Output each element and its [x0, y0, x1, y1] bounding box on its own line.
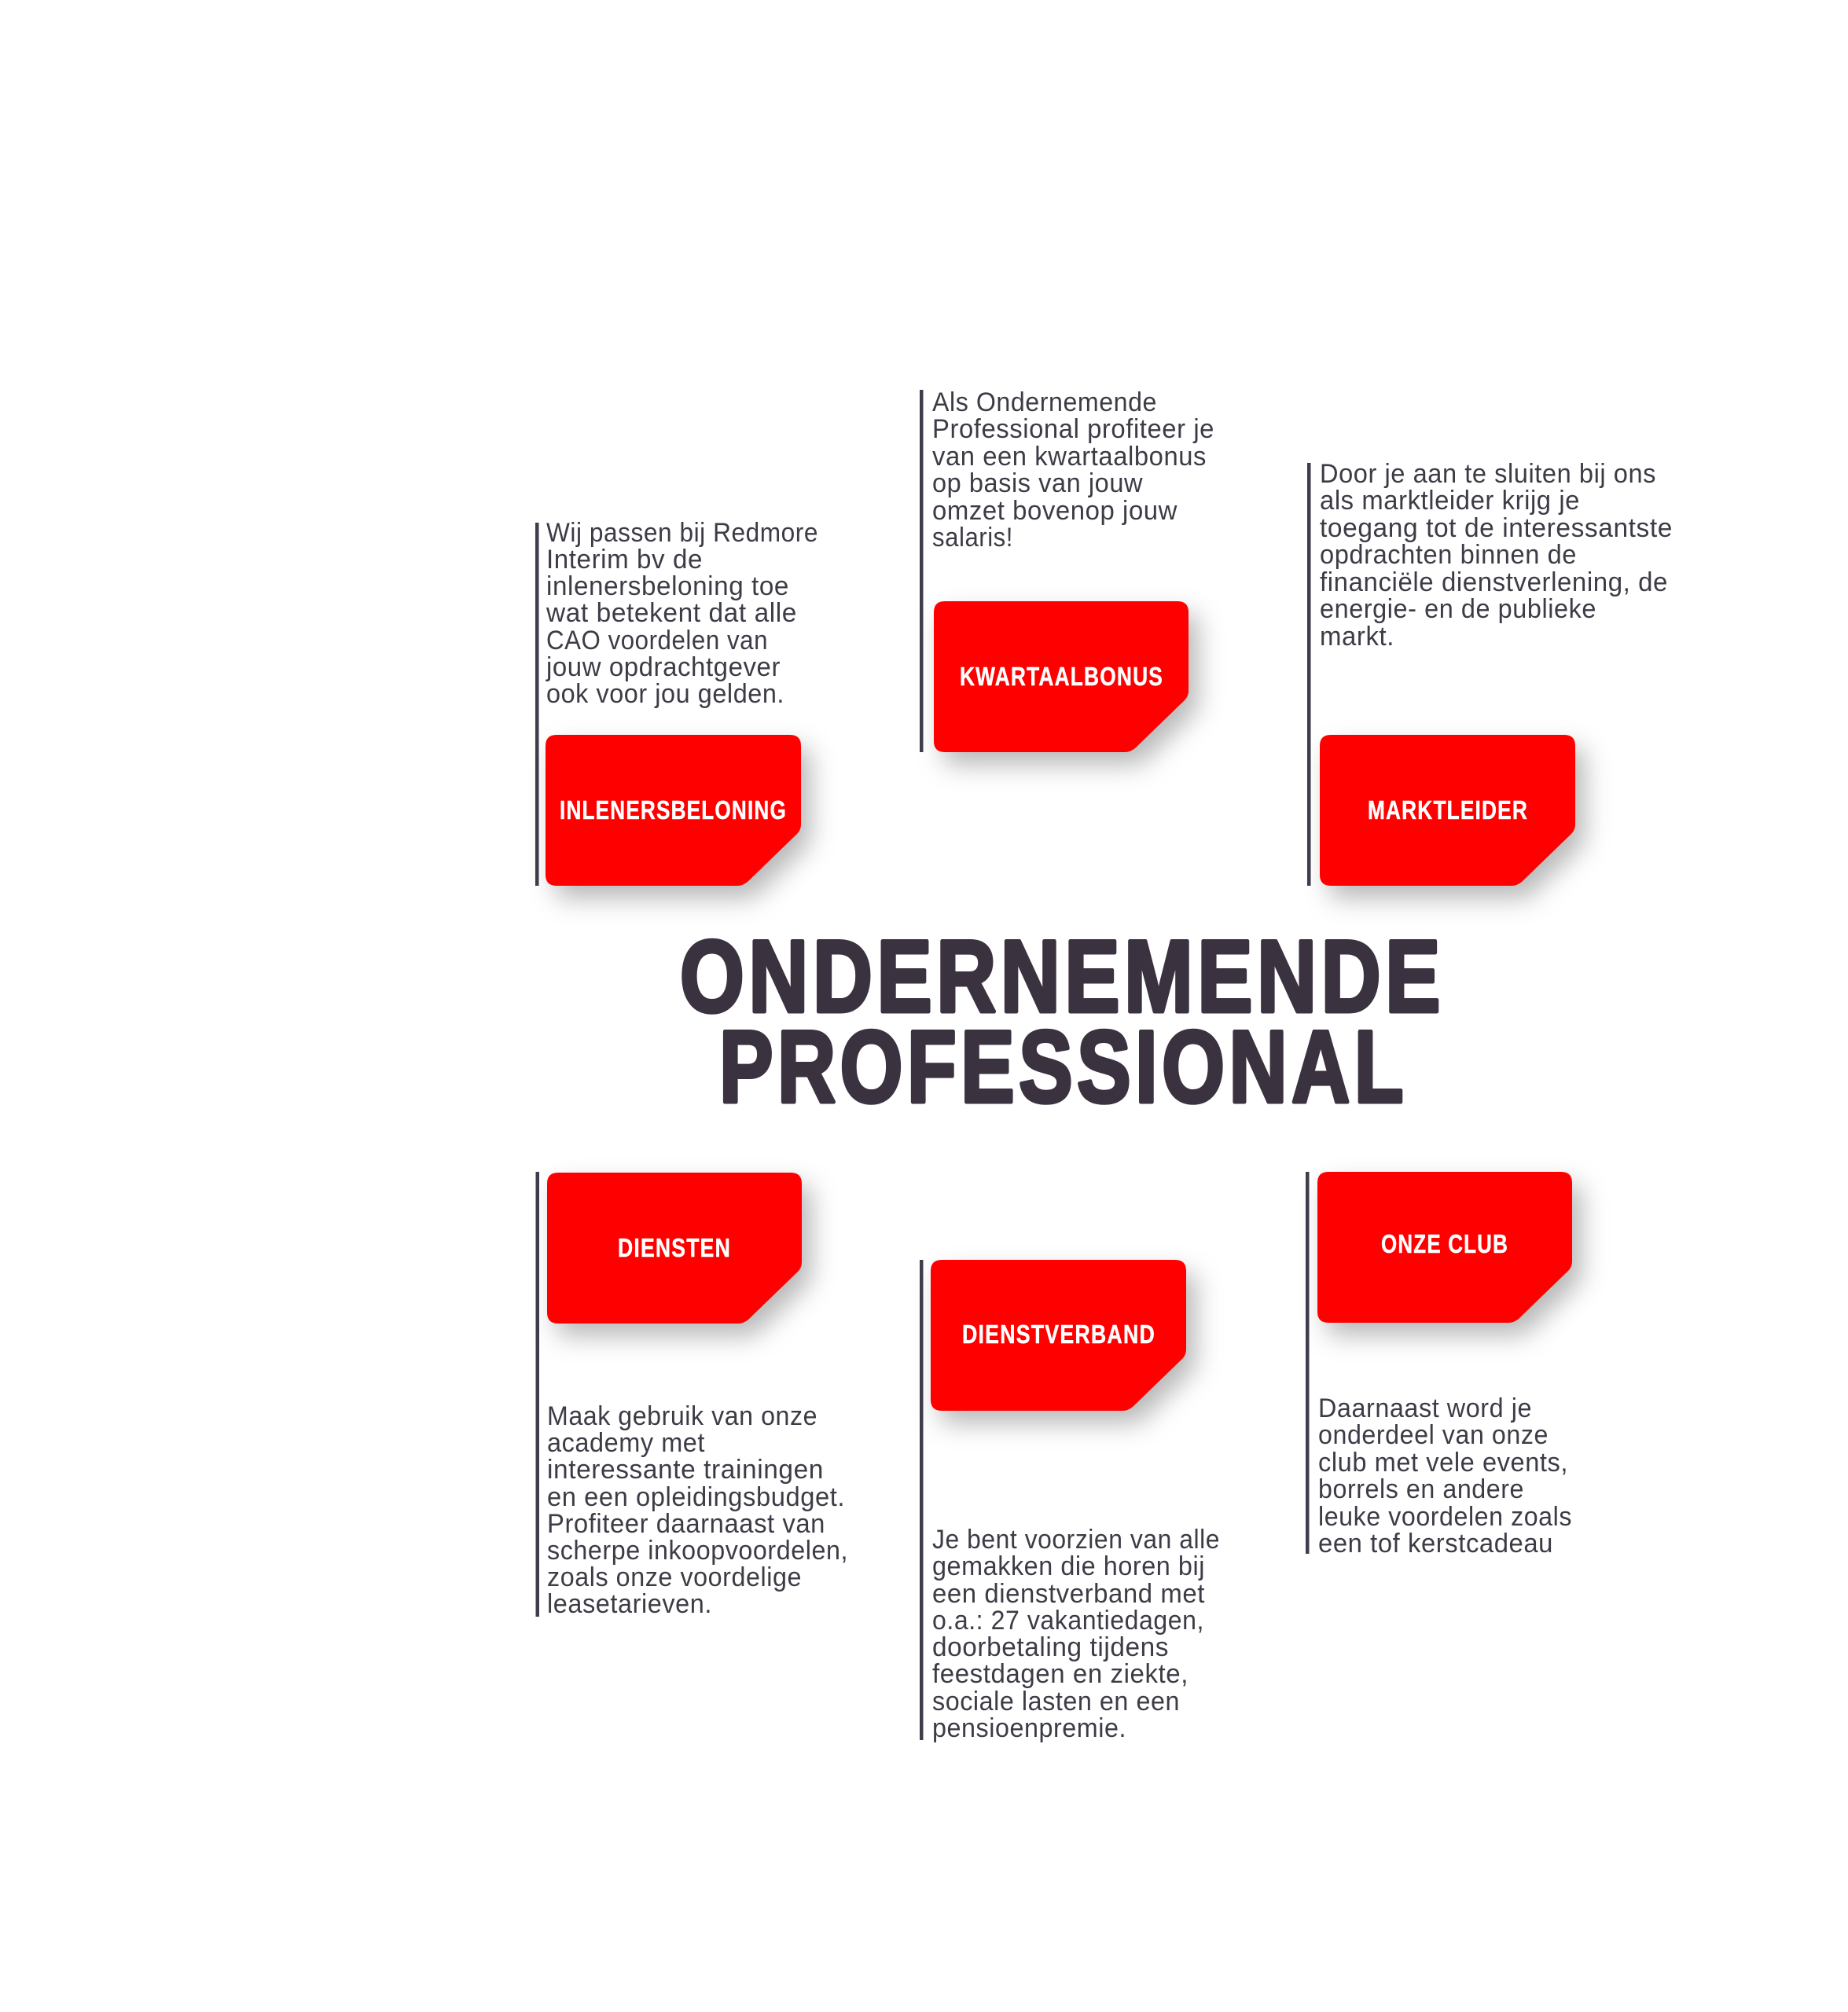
text: diensten description: academy met — [547, 1428, 705, 1458]
title: ONDERNEMENDE — [680, 919, 1445, 1034]
panel: inlenersbeloning — [535, 518, 818, 886]
text: diensten description: Maak gebruik van onze — [547, 1401, 817, 1431]
text: inlenersbeloning description: CAO voordelen van — [546, 626, 768, 655]
text: kwartaalbonus description: van een kwartaalbonus — [932, 442, 1207, 472]
card: marktleider: MARKTLEIDER — [1368, 795, 1528, 824]
text: diensten description: scherpe inkoopvoordelen, — [547, 1536, 848, 1566]
card: marktleider — [1320, 735, 1575, 886]
text: diensten description: interessante trainingen — [547, 1455, 824, 1485]
title — [680, 919, 1445, 1124]
text: diensten description: Profiteer daarnaast van — [547, 1509, 825, 1539]
text: marktleider description: opdrachten binnen de — [1320, 540, 1577, 570]
text: dienstverband description: gemakken die horen bij — [932, 1551, 1205, 1581]
card: dienstverband: DIENSTVERBAND — [962, 1320, 1155, 1349]
text: onze club description: Daarnaast word je — [1318, 1393, 1532, 1423]
text: inlenersbeloning description: wat betekent dat alle — [546, 598, 797, 628]
text: inlenersbeloning description: jouw opdrachtgever — [546, 652, 781, 682]
text: onze club description: een tof kerstcadeau — [1318, 1529, 1553, 1559]
card: kwartaalbonus — [934, 601, 1189, 752]
text: kwartaalbonus description: op basis van jouw — [932, 468, 1143, 498]
panel: dienstverband — [920, 1260, 1220, 1743]
text: dienstverband description: pensioenpremie. — [932, 1713, 1126, 1743]
text: diensten description: zoals onze voordelige — [547, 1562, 802, 1592]
text: dienstverband description: doorbetaling tijdens — [932, 1632, 1169, 1662]
text: marktleider description: Door je aan te sluiten bij ons — [1320, 459, 1656, 489]
text: dienstverband description: sociale lasten en een — [932, 1687, 1180, 1716]
text: marktleider description — [1320, 459, 1673, 652]
card: onze club: ONZE CLUB — [1381, 1229, 1508, 1258]
text: diensten description: leasetarieven. — [547, 1589, 712, 1619]
card: kwartaalbonus: KWARTAALBONUS — [960, 662, 1163, 691]
text: dienstverband description: o.a.: 27 vakantiedagen, — [932, 1606, 1204, 1636]
text: kwartaalbonus description: Als Ondernemende — [932, 387, 1157, 417]
text: dienstverband description — [932, 1525, 1220, 1743]
text: kwartaalbonus description: salaris! — [932, 523, 1013, 553]
text: kwartaalbonus description: Professional profiteer je — [932, 414, 1214, 444]
text: dienstverband description: een dienstverband met — [932, 1579, 1205, 1609]
panel: kwartaalbonus — [920, 387, 1214, 752]
card: inlenersbeloning — [546, 735, 801, 886]
text: onze club description: borrels en andere — [1318, 1474, 1524, 1504]
text: onze club description: club met vele events, — [1318, 1448, 1568, 1478]
panel: onze club — [1306, 1172, 1572, 1559]
text: marktleider description: energie- en de publieke — [1320, 594, 1596, 624]
text: inlenersbeloning description: ook voor jou gelden. — [546, 679, 784, 709]
text: onze club description — [1318, 1393, 1572, 1559]
text: onze club description: leuke voordelen zoals — [1318, 1502, 1572, 1532]
panel: diensten — [536, 1172, 848, 1619]
text: inlenersbeloning description — [546, 518, 818, 709]
text: diensten description: en een opleidingsbudget. — [547, 1482, 845, 1512]
card: inlenersbeloning: INLENERSBELONING — [560, 795, 787, 824]
card: diensten — [547, 1173, 802, 1324]
text: marktleider description: toegang tot de interessantste — [1320, 513, 1673, 543]
text: dienstverband description: feestdagen en ziekte, — [932, 1659, 1189, 1689]
text: kwartaalbonus description: omzet bovenop jouw — [932, 496, 1178, 526]
card: onze club — [1317, 1172, 1572, 1323]
card: diensten: DIENSTEN — [618, 1233, 731, 1262]
text: marktleider description: markt. — [1320, 622, 1394, 652]
panel: marktleider — [1307, 459, 1673, 886]
text: inlenersbeloning description: Wij passen bij Redmore — [546, 518, 818, 548]
text: inlenersbeloning description: Interim bv de — [546, 545, 703, 575]
text: diensten description — [547, 1401, 848, 1619]
text: dienstverband description: Je bent voorzien van alle — [932, 1525, 1220, 1555]
text: kwartaalbonus description — [932, 387, 1214, 553]
card: dienstverband — [931, 1260, 1186, 1411]
text: inlenersbeloning description: inlenersbeloning toe — [546, 571, 789, 601]
title: PROFESSIONAL — [719, 1009, 1408, 1124]
text: marktleider description: als marktleider krijg je — [1320, 486, 1580, 516]
text: marktleider description: financiële dienstverlening, de — [1320, 567, 1668, 597]
text: onze club description: onderdeel van onze — [1318, 1420, 1549, 1450]
